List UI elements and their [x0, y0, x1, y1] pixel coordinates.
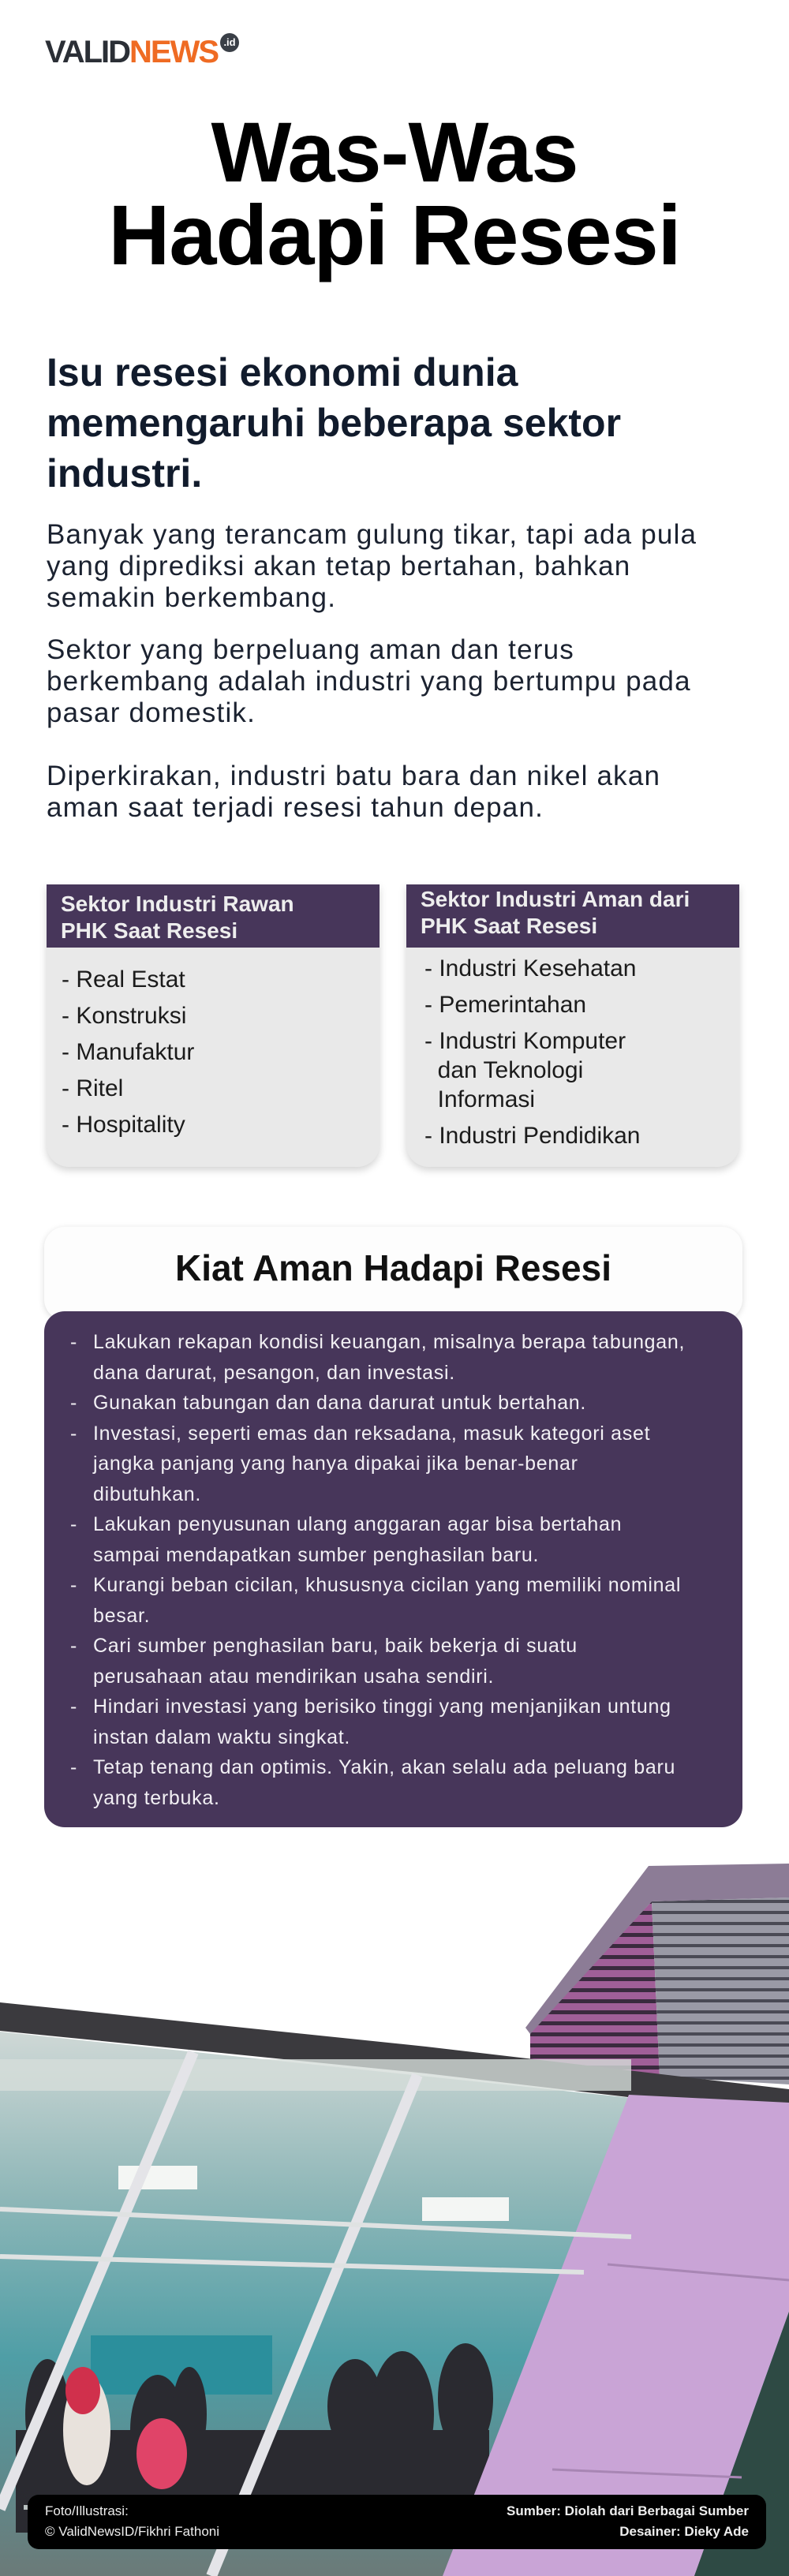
panel: tips list: instan dalam waktu singkat.: [93, 1726, 350, 1748]
panel: tips list: -: [70, 1331, 77, 1353]
panel heading: [406, 884, 739, 948]
paragraph 3: [47, 761, 660, 823]
list: - Industri Pendidikan: [424, 1123, 641, 1149]
subheading: memengaruhi beberapa sektor: [47, 401, 621, 445]
panel: tips list: dibutuhkan.: [93, 1483, 201, 1505]
list: dan Teknologi: [438, 1057, 583, 1083]
panel: tips list: Investasi, seperti emas dan reksadana, masuk kategori aset: [93, 1422, 650, 1444]
heading: kiat aman: Kiat Aman Hadapi Resesi: [175, 1247, 611, 1288]
panel: tips list: Lakukan rekapan kondisi keuangan, misalnya berapa tabungan,: [93, 1331, 685, 1353]
list: [424, 955, 641, 1149]
list: [62, 966, 194, 1138]
logo: VALIDNEWS: [45, 35, 218, 69]
subheading: industri.: [47, 451, 202, 495]
list: Informasi: [438, 1086, 535, 1112]
panel: tips list: -: [70, 1392, 77, 1414]
photo credit: © ValidNewsID/Fikhri Fathoni: [45, 2524, 219, 2539]
panel: tips list: yang terbuka.: [93, 1786, 220, 1808]
panel heading: Sektor Industri Aman dari: [421, 887, 690, 911]
panel: tips list: Hindari investasi yang berisiko tinggi yang menjanjikan untung: [93, 1696, 671, 1718]
source credit: [507, 2503, 749, 2539]
photo credit: [45, 2503, 219, 2539]
footer credits: [28, 2495, 766, 2549]
panel: tips list: Kurangi beban cicilan, khususnya cicilan yang memiliki nominal: [93, 1574, 681, 1596]
list: - Hospitality: [62, 1112, 185, 1138]
paragraph 1: semakin berkembang.: [47, 582, 336, 613]
list: - Manufaktur: [62, 1039, 194, 1065]
source credit: Desainer: Dieky Ade: [619, 2524, 749, 2539]
heading: kiat aman: [44, 1227, 742, 1320]
title: Was-Was: [211, 104, 578, 200]
panel: tips list: -: [70, 1574, 77, 1596]
paragraph 1: yang diprediksi akan tetap bertahan, bahkan: [47, 551, 630, 581]
list: - Ritel: [62, 1075, 123, 1101]
subheading: [47, 350, 621, 495]
panel: tips list: Gunakan tabungan dan dana darurat untuk bertahan.: [93, 1392, 586, 1414]
logo: .id: [223, 36, 236, 48]
paragraph 1: [47, 519, 697, 613]
panel: tips list: -: [70, 1696, 77, 1718]
panel heading: PHK Saat Resesi: [61, 918, 237, 943]
panel: tips list: besar.: [93, 1605, 150, 1627]
panel: tips list: dana darurat, pesangon, dan investasi.: [93, 1362, 455, 1384]
panel: tips list: perusahaan atau mendirikan usaha sendiri.: [93, 1665, 494, 1687]
list: - Konstruksi: [62, 1003, 186, 1029]
paragraph 2: [47, 634, 691, 728]
panel: tips list: -: [70, 1756, 77, 1778]
panel: tips list: -: [70, 1513, 77, 1535]
paragraph 2: Sektor yang berpeluang aman dan terus: [47, 634, 574, 665]
panel: tips list: [44, 1311, 742, 1827]
panel: tips list: -: [70, 1635, 77, 1657]
panel heading: PHK Saat Resesi: [421, 914, 597, 938]
source credit: Sumber: Diolah dari Berbagai Sumber: [507, 2503, 749, 2518]
title: [108, 104, 681, 282]
panel: tips list: Tetap tenang dan optimis. Yakin, akan selalu ada peluang baru: [93, 1756, 675, 1778]
panel: tips list: -: [70, 1422, 77, 1444]
panel heading: [47, 884, 380, 948]
paragraph 3: Diperkirakan, industri batu bara dan nikel akan: [47, 761, 660, 791]
panel: tips list: jangka panjang yang hanya dipakai jika benar-benar: [93, 1453, 578, 1475]
panel: aman PHK: [406, 884, 739, 1167]
panel: tips list: Lakukan penyusunan ulang anggaran agar bisa bertahan: [93, 1513, 622, 1535]
title: Hadapi Resesi: [108, 187, 681, 282]
panel: tips list: sampai mendapatkan sumber penghasilan baru.: [93, 1543, 539, 1565]
paragraph 1: Banyak yang terancam gulung tikar, tapi ada pula: [47, 519, 697, 550]
paragraph 3: aman saat terjadi resesi tahun depan.: [47, 792, 544, 823]
panel: rawan PHK: [47, 884, 380, 1167]
photo credit: Foto/Illustrasi:: [45, 2503, 129, 2518]
list: - Industri Komputer: [424, 1028, 626, 1054]
panel heading: Sektor Industri Rawan: [61, 892, 294, 916]
panel: tips list: Cari sumber penghasilan baru, baik bekerja di suatu: [93, 1635, 578, 1657]
subheading: Isu resesi ekonomi dunia: [47, 350, 518, 394]
list: - Industri Kesehatan: [424, 955, 636, 981]
photo: station building: [0, 1864, 789, 2576]
list: - Pemerintahan: [424, 992, 586, 1018]
paragraph 2: pasar domestik.: [47, 697, 256, 728]
list: - Real Estat: [62, 966, 185, 993]
paragraph 2: berkembang adalah industri yang bertumpu pada: [47, 666, 691, 697]
